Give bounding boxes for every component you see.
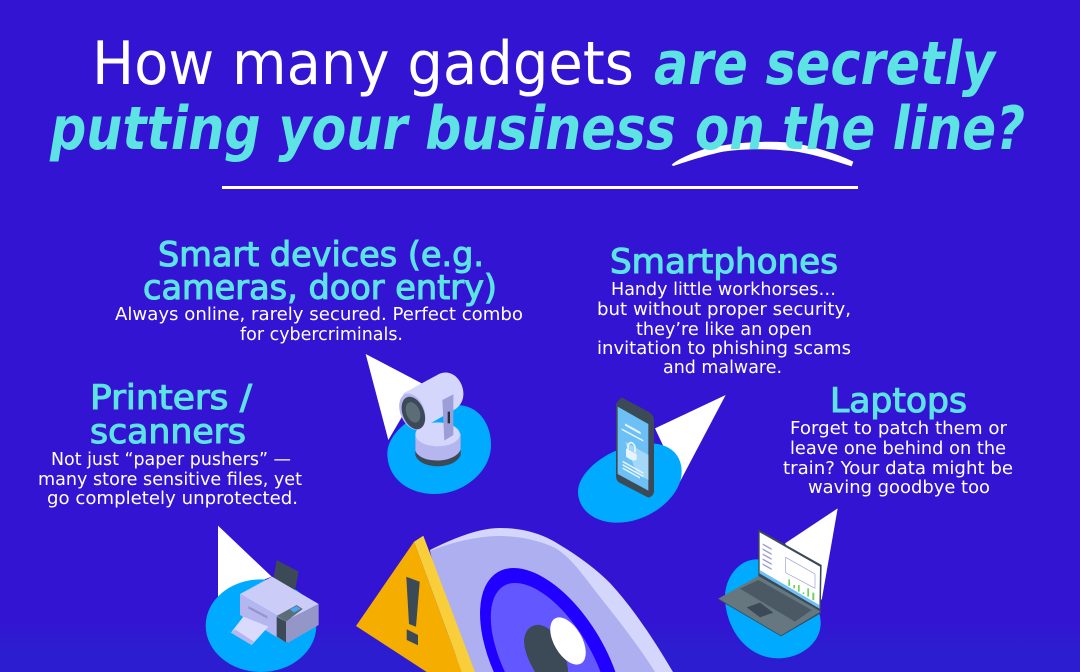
panel: smart devices text [115, 235, 523, 345]
panel: smart devices text: cameras, door entry) [143, 268, 497, 308]
panel: smartphones text: invitation to phishing scams [597, 338, 851, 359]
pupil highlight [543, 611, 593, 671]
panel: printers text: Printers / [90, 378, 253, 418]
panel: printers text: scanners [90, 412, 246, 452]
illustration: central eye with warning sign [356, 528, 673, 672]
icon: smartphone [578, 395, 726, 523]
warning triangle edge [414, 536, 475, 672]
panel: laptops text: Forget to patch them or [790, 418, 1008, 439]
panel: smartphones text: Smartphones [610, 242, 838, 282]
panel: smart devices text: Always online, rarely secured. Perfect combo [115, 304, 523, 325]
panel: printers text [38, 378, 302, 509]
panel: laptops text: Laptops [830, 381, 967, 421]
panel: laptops text: waving goodbye too [808, 477, 990, 498]
eye outer rim [430, 528, 673, 672]
panel: smartphones text: but without proper security, [597, 299, 851, 320]
panel: printers text: go completely unprotected. [47, 488, 298, 509]
iris ring [480, 568, 615, 672]
divider [222, 186, 858, 189]
panel: laptops text: leave one behind on the [790, 438, 1006, 459]
title: How many gadgets [92, 29, 634, 99]
eye inner face [430, 536, 655, 672]
panel: smartphones text: they’re like an open [636, 319, 812, 340]
iris [491, 583, 600, 672]
icon: laptop [718, 508, 838, 658]
icon: printer [206, 526, 319, 672]
title [49, 29, 1025, 164]
pupil [524, 625, 568, 672]
title: are secretly [654, 29, 997, 99]
panel: laptops text [783, 381, 1013, 498]
panel: smartphones text: and malware. [663, 357, 782, 378]
panel: smart devices text: for cybercriminals. [240, 324, 403, 345]
panel: smartphones text: Handy little workhorses… [611, 279, 836, 300]
title: putting your business [49, 94, 676, 164]
panel: printers text: Not just “paper pushers” — [51, 449, 291, 470]
panel: smartphones text [597, 242, 851, 378]
panel: smart devices text: Smart devices (e.g. [158, 235, 484, 275]
panel: printers text: many store sensitive files, yet [38, 469, 302, 490]
warning triangle [356, 542, 462, 672]
brush underline [672, 142, 853, 166]
icon: security camera [366, 354, 491, 494]
panel: laptops text: train? Your data might be [783, 458, 1013, 479]
exclamation mark [406, 577, 420, 645]
